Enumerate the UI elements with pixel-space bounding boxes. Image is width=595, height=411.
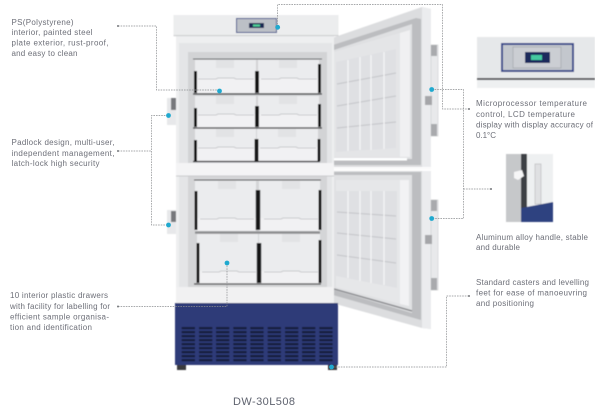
- text: microprocessor control: Microprocessor temperature: [476, 99, 588, 108]
- upper drawers: [193, 59, 322, 162]
- text: casters: feet for ease of manoeuvring: [476, 288, 587, 298]
- text: casters: and positioning: [476, 299, 534, 308]
- text: interior drawers: tion and identification: [10, 323, 92, 332]
- text: polystyrene interior: PS(Polystyrene): [12, 18, 74, 27]
- leader lines: [117, 4, 492, 367]
- photo: control panel closeup: [477, 37, 595, 88]
- freezer unit: [167, 7, 438, 370]
- text: padlock design: Padlock design, multi-user,: [12, 138, 114, 147]
- control panel: [236, 18, 277, 33]
- text: interior drawers: efficient sample organisa-: [10, 312, 109, 322]
- text: padlock design: latch-lock high security: [12, 159, 100, 168]
- lower door handle: [425, 200, 438, 290]
- lower drawers: [194, 180, 321, 284]
- compressor base: [175, 303, 338, 370]
- upper door: [332, 7, 431, 170]
- lower padlock: [167, 210, 176, 234]
- upper padlock: [167, 98, 176, 125]
- text: microprocessor control: control, LCD temperature: [476, 110, 576, 119]
- top control header: [174, 15, 338, 36]
- text: polystyrene interior: and easy to clean: [12, 49, 78, 58]
- vents: [182, 327, 333, 361]
- text: interior drawers: 10 interior plastic drawers: [10, 291, 108, 300]
- text: polystyrene interior: interior, painted steel: [12, 28, 93, 37]
- photo: handle closeup: [506, 154, 553, 222]
- upper door handle: [425, 45, 438, 136]
- lower door: [332, 171, 431, 329]
- text: padlock design: independent management,: [12, 149, 114, 158]
- text: polystyrene interior: plate exterior, rust-proof,: [12, 38, 108, 48]
- text: aluminum handle: and durable: [476, 243, 521, 252]
- cabinet body: [176, 36, 334, 303]
- casters: [177, 365, 337, 370]
- text: microprocessor control: 0.1°C: [476, 131, 496, 140]
- text: casters: Standard casters and levelling: [476, 278, 589, 287]
- cyan markers: [166, 25, 434, 369]
- text: aluminum handle: Aluminum alloy handle, stable: [476, 233, 589, 242]
- text: microprocessor control: display with display accuracy of: [476, 120, 594, 130]
- text: interior drawers: with facility for labelling for: [9, 302, 110, 311]
- model name: DW-30L508: [233, 396, 295, 408]
